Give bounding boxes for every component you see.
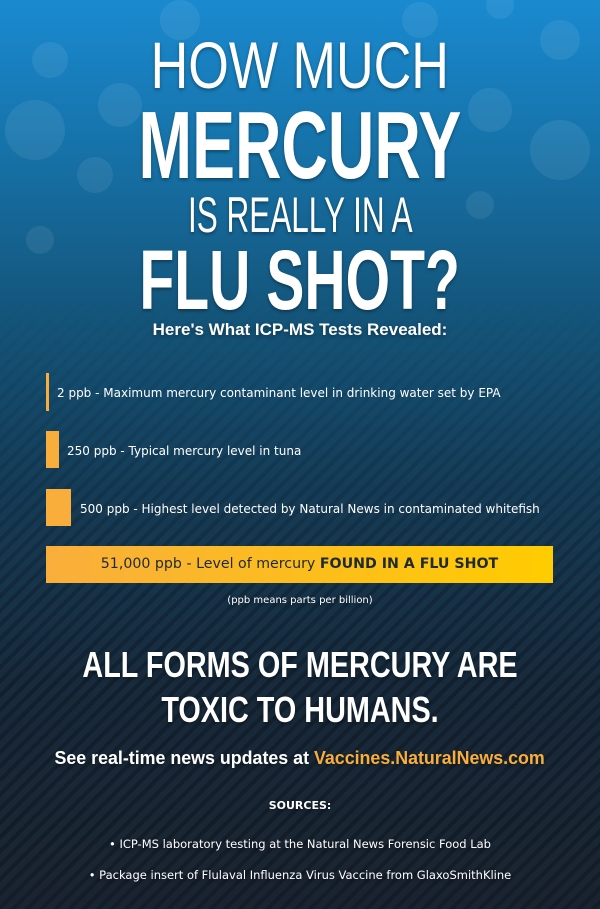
statement: ALL FORMS OF MERCURY ARE — [82, 644, 518, 685]
label: 2 ppb: 2 ppb - Maximum mercury contaminant level in drinking water set by EPA — [57, 386, 501, 400]
statement — [82, 644, 518, 730]
title line 3: IS REALLY IN A — [188, 187, 412, 243]
bar: 51,000 ppb — [46, 546, 553, 583]
label: 500 ppb: 500 ppb - Highest level detected by Natural News in contaminated whitefish — [80, 502, 540, 516]
sources heading: SOURCES: — [269, 799, 331, 812]
subtitle: Here's What ICP-MS Tests Revealed: — [153, 320, 447, 339]
title line 2: MERCURY — [139, 92, 461, 199]
title line 4: FLU SHOT? — [140, 233, 460, 327]
note: (ppb means parts per billion) — [227, 595, 373, 606]
link line: See real-time news updates at Vaccines.NaturalNews.com — [55, 748, 545, 768]
bar: 250 ppb — [46, 431, 59, 468]
statement: TOXIC TO HUMANS. — [161, 689, 439, 730]
decorative bubbles — [5, 0, 590, 254]
label: 250 ppb: 250 ppb - Typical mercury level in tuna — [67, 444, 301, 458]
bar chart — [46, 373, 553, 583]
bar: 2 ppb — [46, 373, 49, 411]
bar: 500 ppb — [46, 489, 71, 526]
sources list: • ICP-MS laboratory testing at the Natural News Forensic Food Lab — [109, 837, 491, 851]
title line 1: HOW MUCH — [151, 28, 449, 102]
bar: 51,000 ppb: 51,000 ppb - Level of mercury FOUND IN A FLU SHOT — [101, 556, 498, 572]
sources list — [89, 837, 511, 882]
sources list: • Package insert of Flulaval Influenza Virus Vaccine from GlaxoSmithKline — [89, 868, 511, 882]
